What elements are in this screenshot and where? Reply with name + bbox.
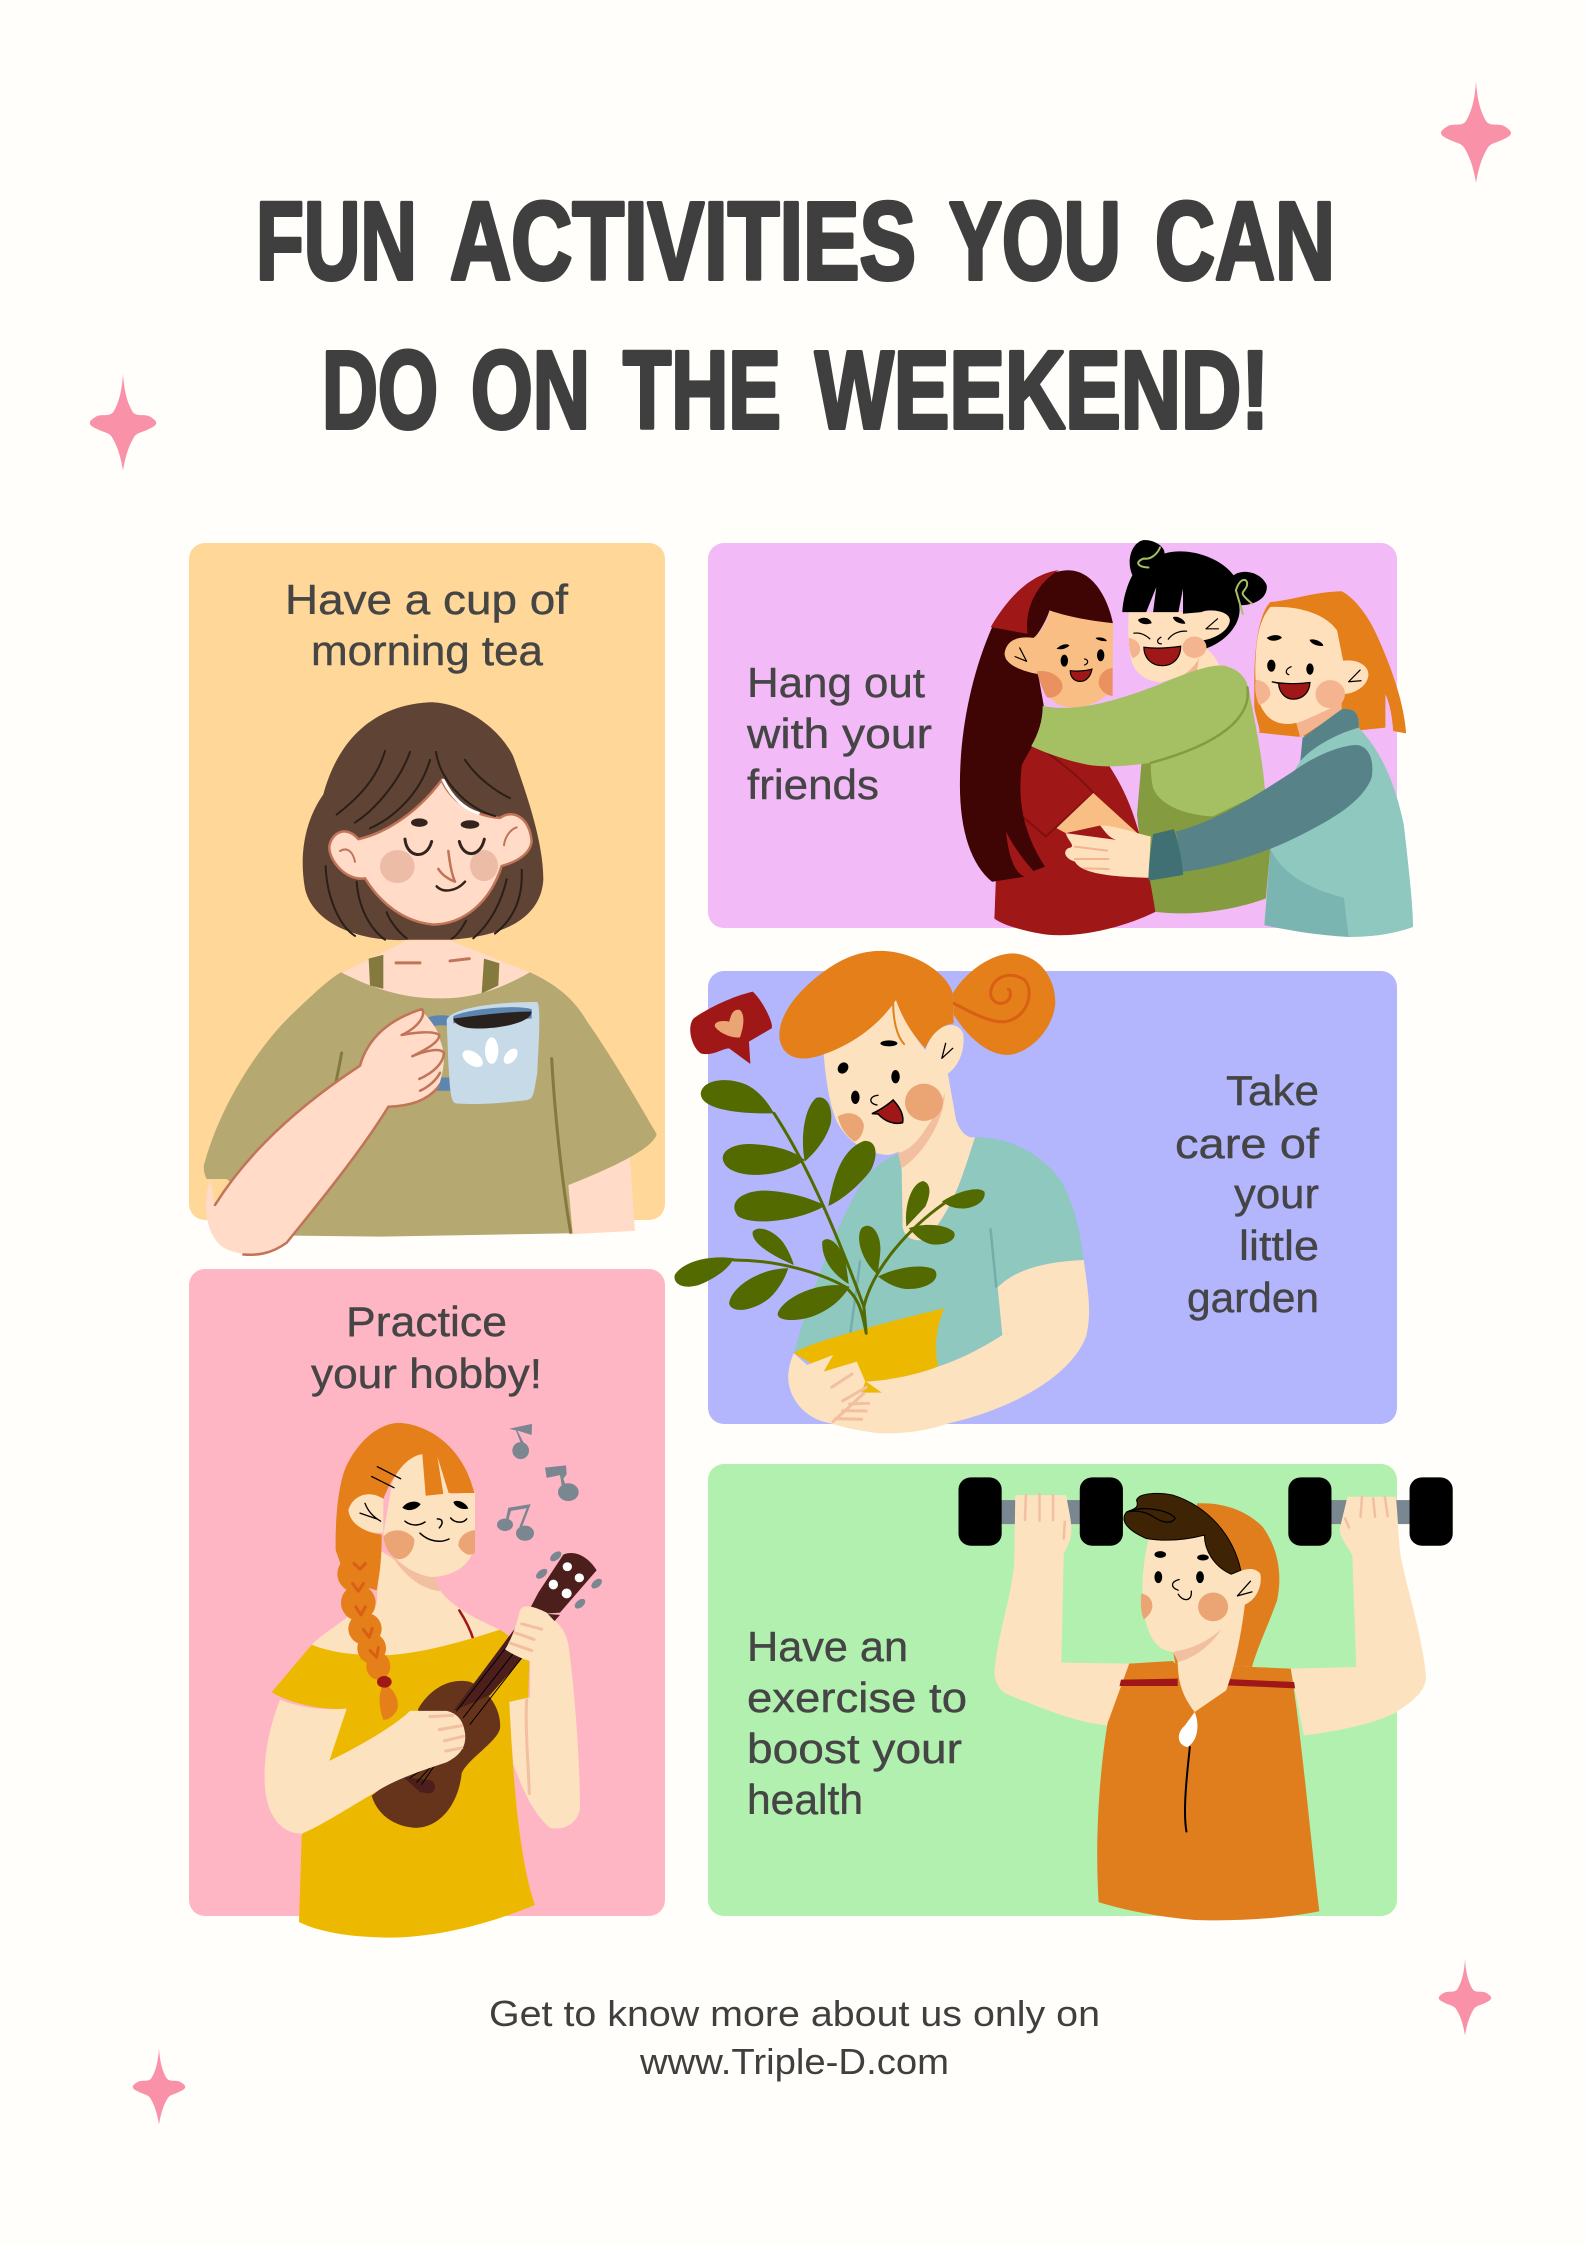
arm and hand [206, 1009, 444, 1254]
face and ears [329, 780, 532, 925]
text: morning tea: Have a cup of [285, 576, 568, 623]
dress [272, 1630, 535, 1938]
text: exercise: boost your [747, 1725, 962, 1772]
icon: music notes [497, 1424, 579, 1541]
hoodie [1097, 1661, 1319, 1920]
text: exercise: Have an [747, 1623, 908, 1670]
neck and chest [312, 1550, 500, 1655]
right friend vest [1264, 709, 1413, 937]
neck [897, 1067, 975, 1240]
middle friend body [1137, 761, 1270, 913]
footer text [489, 1993, 1100, 2082]
face [824, 1000, 964, 1155]
hair bun [953, 953, 1055, 1055]
braid [337, 1555, 398, 1720]
title: YOU [949, 180, 1121, 303]
text: garden [1175, 1067, 1319, 1321]
shirt [794, 1137, 1084, 1367]
illustration: woman playing ukulele [265, 1423, 603, 1938]
face [1142, 1535, 1261, 1652]
illustration: three friends hugging [960, 540, 1413, 937]
text: morning tea: morning tea [311, 627, 544, 674]
text: friends: friends [747, 761, 879, 808]
mug [447, 1002, 539, 1104]
middle friend arm [1031, 665, 1265, 816]
panel: morning tea [189, 543, 665, 1255]
left friend face [1005, 610, 1113, 708]
right friend arm [1176, 745, 1372, 872]
icon: sparkle bottom left [133, 2048, 185, 2124]
text: morning tea [285, 576, 568, 674]
title: ON [471, 329, 590, 452]
pot [794, 1308, 944, 1393]
dumbbell left [959, 1477, 1123, 1546]
arms [994, 1495, 1129, 1725]
text: garden: your [1234, 1170, 1319, 1217]
playing arm [265, 1700, 465, 1834]
middle friend head [1128, 612, 1220, 682]
icon: sparkle bottom right [1439, 1959, 1491, 2036]
text: exercise [747, 1623, 967, 1823]
icon: sparkle top right [1441, 81, 1511, 183]
ukulele [372, 1549, 603, 1828]
title: ACTIVITIES [450, 180, 916, 303]
icon: heart speech bubble [690, 992, 772, 1064]
title: WEEKEND! [815, 329, 1269, 452]
text: hobby: Practice [346, 1298, 507, 1345]
illustration: person lifting dumbbells [959, 1477, 1453, 1920]
text: friends: Hang out [747, 659, 925, 706]
illustration: woman holding a plant [675, 951, 1089, 1433]
hair [336, 1423, 474, 1590]
text: hobby [311, 1298, 542, 1397]
text: garden: care of [1175, 1120, 1319, 1167]
text: exercise: health [747, 1776, 863, 1823]
text: exercise: exercise to [747, 1674, 967, 1721]
dumbbell right [1288, 1477, 1453, 1546]
panel: little garden [675, 951, 1397, 1433]
panel: hang out with friends [708, 540, 1413, 937]
title: DO [322, 329, 438, 452]
text: friends: with your [746, 710, 932, 757]
arms and hands [788, 1260, 1089, 1433]
panel: practice your hobby [189, 1269, 665, 1938]
hair [779, 951, 954, 1059]
right friend hair [1254, 591, 1406, 737]
icon: sparkle left [90, 374, 156, 470]
hood [1173, 1503, 1279, 1667]
footer text: www.Triple-D.com [639, 2041, 949, 2082]
left friend hair [960, 570, 1113, 882]
title: THE [623, 329, 781, 452]
title [256, 180, 1335, 452]
footer text: Get to know more about us only on [489, 1993, 1100, 2034]
title: CAN [1155, 180, 1335, 303]
left friend shirt [994, 746, 1155, 935]
far arm [508, 1608, 580, 1828]
fretting hand [505, 1606, 563, 1662]
text: hobby: your hobby! [311, 1350, 542, 1397]
text: garden: garden [1187, 1274, 1319, 1321]
neck [1173, 1597, 1246, 1712]
mug handle [415, 1020, 448, 1037]
plant [675, 1080, 985, 1333]
text: friends [746, 659, 932, 808]
text: garden: Take [1226, 1067, 1319, 1114]
panel: exercise [708, 1464, 1453, 1920]
title: FUN [256, 180, 417, 303]
hair [1124, 1493, 1241, 1574]
right friend face [1296, 698, 1342, 738]
drawstring [1179, 1712, 1197, 1747]
face [383, 1528, 440, 1591]
illustration: woman holding a cup [204, 702, 657, 1255]
text: garden: little [1239, 1222, 1319, 1269]
